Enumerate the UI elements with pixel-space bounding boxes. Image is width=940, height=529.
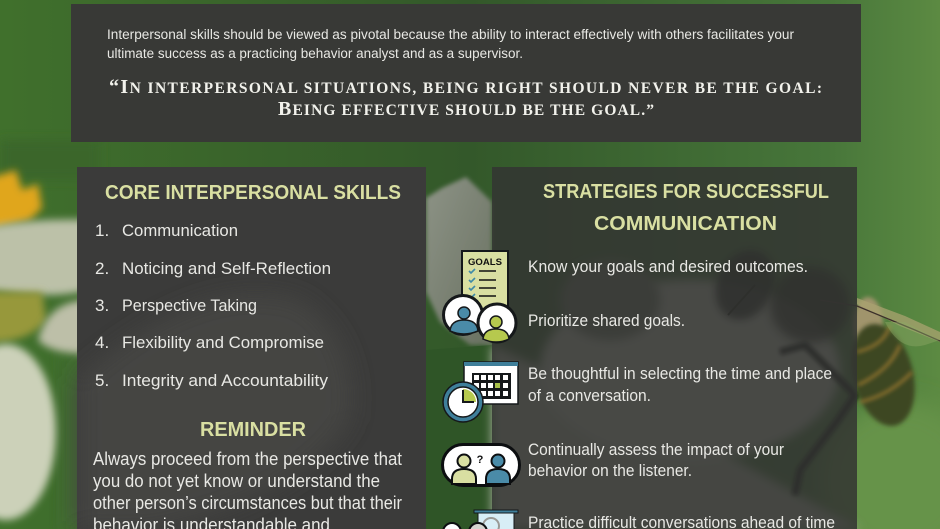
strategy items: behavior on the listener.	[528, 462, 692, 480]
reminder text: Always proceed from the perspective that	[93, 449, 402, 469]
intro paragraph	[107, 27, 795, 61]
heading: strategies	[544, 184, 828, 230]
skills list: Flexibility and Compromise	[122, 333, 324, 352]
icon: calendar and clock	[443, 362, 518, 422]
icon: two people with question mark	[442, 444, 520, 486]
icon: presentation board with people	[443, 510, 518, 529]
strategy items: of a conversation.	[528, 387, 651, 405]
heading: strategies: STRATEGIES FOR SUCCESSFUL	[543, 181, 829, 203]
icon: two people with question mark: ?	[477, 454, 484, 466]
skills list: Noticing and Self-Reflection	[122, 259, 331, 278]
intro paragraph: ultimate success as a practicing behavior analyst and as a supervisor.	[107, 46, 523, 61]
skills list: 1.	[95, 221, 109, 240]
heading: strategies: COMMUNICATION	[594, 213, 777, 235]
quote	[110, 79, 821, 115]
quote: BEING EFFECTIVE SHOULD BE THE GOAL.”	[278, 98, 654, 120]
reminder text: you do not yet know or understand the	[93, 471, 380, 491]
strategy items: Continually assess the impact of your	[528, 441, 784, 459]
skills list: 5.	[95, 371, 109, 390]
skills list: Perspective Taking	[122, 296, 257, 315]
icon: goals document with two people: GOALS	[468, 257, 502, 268]
skills list: Integrity and Accountability	[122, 371, 329, 390]
skills list: 3.	[95, 296, 109, 315]
heading: core skills: CORE INTERPERSONAL SKILLS	[105, 182, 401, 204]
skills list	[95, 221, 331, 390]
panel: introduction	[71, 4, 861, 142]
intro paragraph: Interpersonal skills should be viewed as pivotal because the ability to interact effectively with others facilitates your	[107, 27, 795, 42]
strategy items: Prioritize shared goals.	[528, 312, 685, 330]
reminder text: other person’s circumstances but that their	[93, 493, 402, 513]
panel: core interpersonal skills	[77, 167, 426, 529]
skills list: 4.	[95, 333, 109, 352]
strategy items: Know your goals and desired outcomes.	[528, 258, 808, 276]
heading: reminder: REMINDER	[200, 419, 307, 441]
panel: strategies	[492, 167, 857, 529]
bee body	[852, 294, 940, 428]
skills list: 2.	[95, 259, 109, 278]
strategy items: Be thoughtful in selecting the time and place	[528, 365, 832, 383]
icon: goals document with two people	[444, 251, 516, 342]
skills list: Communication	[122, 221, 238, 240]
reminder text	[93, 449, 402, 529]
quote: “IN INTERPERSONAL SITUATIONS, BEING RIGHT SHOULD NEVER BE THE GOAL:	[109, 76, 822, 98]
strategy items	[528, 258, 835, 529]
